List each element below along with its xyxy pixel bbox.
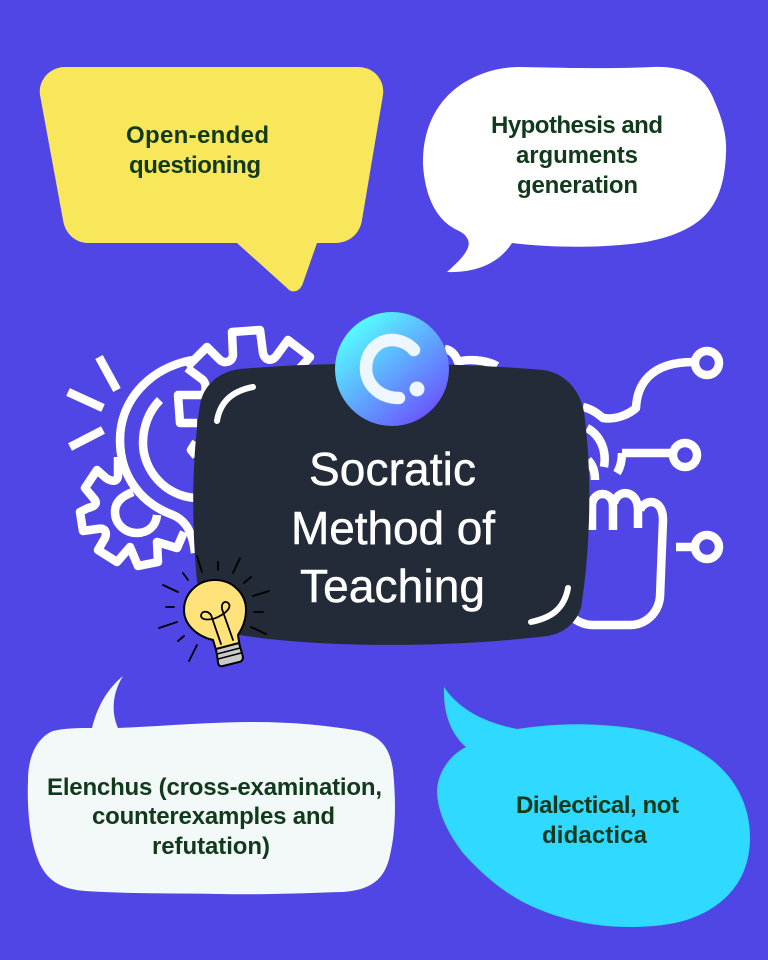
title text: Socratic (309, 443, 476, 495)
white speech bubble: hypothesis and arguments generation (423, 67, 726, 272)
white speech bubble: hypothesis and arguments generation: Hypothesis and (491, 112, 663, 139)
logo badge (335, 312, 449, 426)
icon: gears (80, 330, 310, 566)
icon: light rays left of gears (68, 357, 117, 447)
cyan speech bubble: dialectical, not didactica: Dialectical, not (516, 792, 679, 819)
light speech bubble: elenchus: refutation) (152, 833, 270, 860)
title text: Teaching (300, 560, 485, 612)
cyan speech bubble: dialectical, not didactica (437, 687, 750, 927)
white speech bubble: hypothesis and arguments generation: arguments (516, 142, 638, 169)
icon: light bulb (159, 556, 269, 666)
title text (291, 443, 495, 612)
panel corner accents (217, 387, 568, 622)
icon: hand with circuit nodes (445, 349, 719, 625)
yellow speech bubble: open-ended questioning (40, 67, 383, 291)
yellow speech bubble: open-ended questioning: questioning (129, 152, 261, 179)
title text: Method of (291, 502, 495, 554)
light speech bubble: elenchus: Elenchus (cross-examination, (47, 774, 382, 801)
yellow speech bubble: open-ended questioning: Open-ended (126, 122, 269, 149)
light speech bubble: elenchus (28, 676, 395, 894)
dark title panel (193, 363, 589, 645)
white speech bubble: hypothesis and arguments generation: generation (517, 172, 638, 199)
cyan speech bubble: dialectical, not didactica: didactica (542, 822, 648, 849)
light speech bubble: elenchus: counterexamples and (92, 803, 335, 830)
